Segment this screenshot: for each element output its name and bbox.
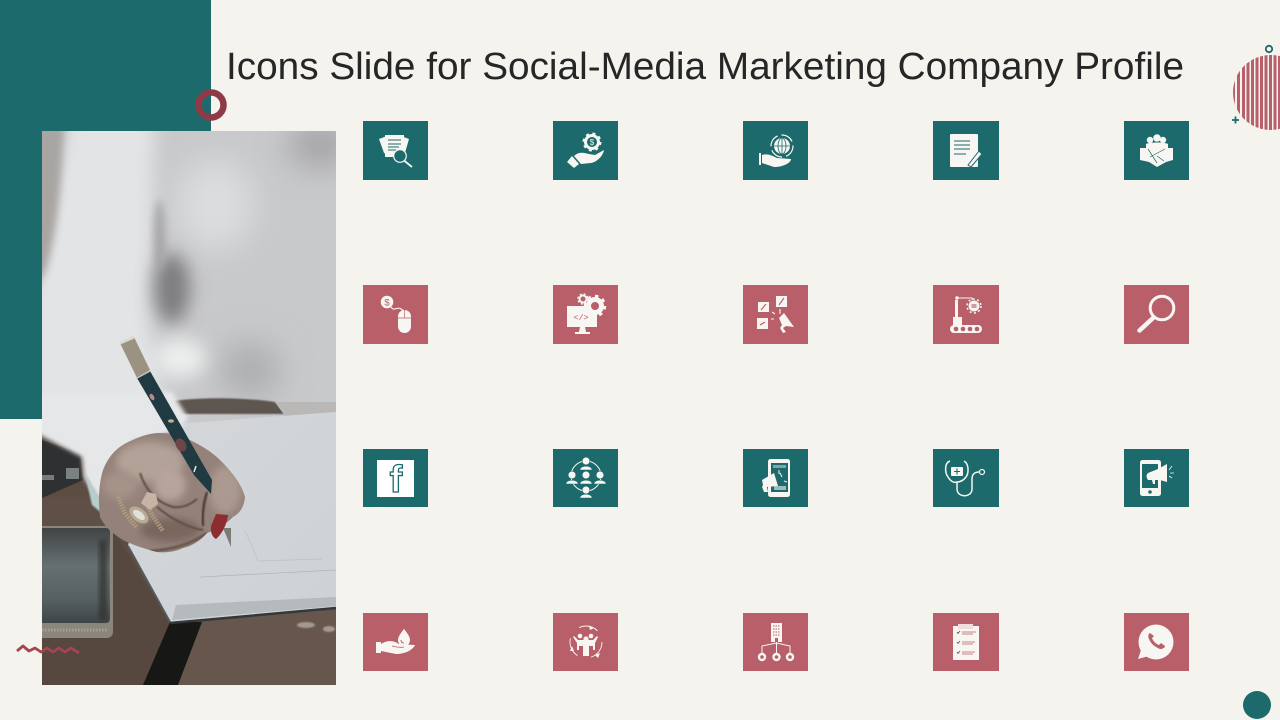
phone on table bbox=[42, 526, 113, 638]
icon tile: team with circular arrows bbox=[553, 613, 618, 671]
icon tile: stethoscope with medical case bbox=[933, 449, 999, 507]
icon tile: code monitor with gears: </> bbox=[573, 313, 589, 323]
icon tile: document and pencil bbox=[933, 121, 999, 180]
notebook bbox=[128, 412, 336, 622]
sleeve cuff bbox=[36, 392, 188, 505]
teal dot bottom right bbox=[1243, 691, 1271, 719]
icon tile: drop in hand bbox=[363, 613, 428, 671]
icon tile: smartphone with loudspeaker bbox=[1124, 449, 1189, 507]
icon tile: globe in hand bbox=[743, 121, 808, 180]
sweater shading bbox=[42, 131, 166, 396]
red nail bbox=[211, 514, 228, 539]
ring bbox=[118, 492, 163, 531]
decorative ring bbox=[198, 92, 224, 118]
icon tile: social media megaphone bbox=[743, 285, 808, 344]
icon tile: code monitor with gears bbox=[553, 285, 618, 344]
hand bbox=[99, 433, 245, 552]
small teal plus bbox=[1232, 116, 1239, 124]
title: Icons Slide for Social-Media Marketing Company Profile bbox=[226, 46, 1184, 88]
icon tile: phone with megaphone bbox=[743, 449, 808, 507]
icon tile: corporate hierarchy bbox=[743, 613, 808, 671]
desk behind bbox=[168, 398, 285, 414]
icon tile: people network bbox=[553, 449, 618, 507]
pen tip bbox=[223, 528, 231, 547]
icon tile: documents search bbox=[363, 121, 428, 180]
icon tile: handshake and team bbox=[1124, 121, 1189, 180]
squiggle accent bbox=[17, 646, 79, 653]
icon tile: pay per click mouse: $ bbox=[384, 298, 390, 308]
dark device bbox=[42, 440, 83, 498]
wooden table bbox=[42, 431, 263, 636]
teal corner panel bbox=[0, 0, 211, 419]
icon tile: facebook bbox=[363, 449, 428, 507]
small teal ring bbox=[1266, 46, 1272, 52]
icon tile: robot arm conveyor bbox=[933, 285, 999, 344]
icon tile: pay per click mouse bbox=[363, 285, 428, 344]
photo: hand writing in a notebook bbox=[42, 131, 336, 685]
icon tile: gear in hand: $ bbox=[590, 138, 595, 147]
icon tile: WhatsApp bbox=[1124, 613, 1189, 671]
icon tile: magnifying glass bbox=[1124, 285, 1189, 344]
icon tile: checklist clipboard bbox=[933, 613, 999, 671]
decorative striped circle bbox=[1233, 55, 1280, 130]
pen bbox=[120, 337, 150, 378]
icon tile: gear in hand bbox=[553, 121, 618, 180]
icon tile: facebook: f bbox=[390, 459, 403, 501]
